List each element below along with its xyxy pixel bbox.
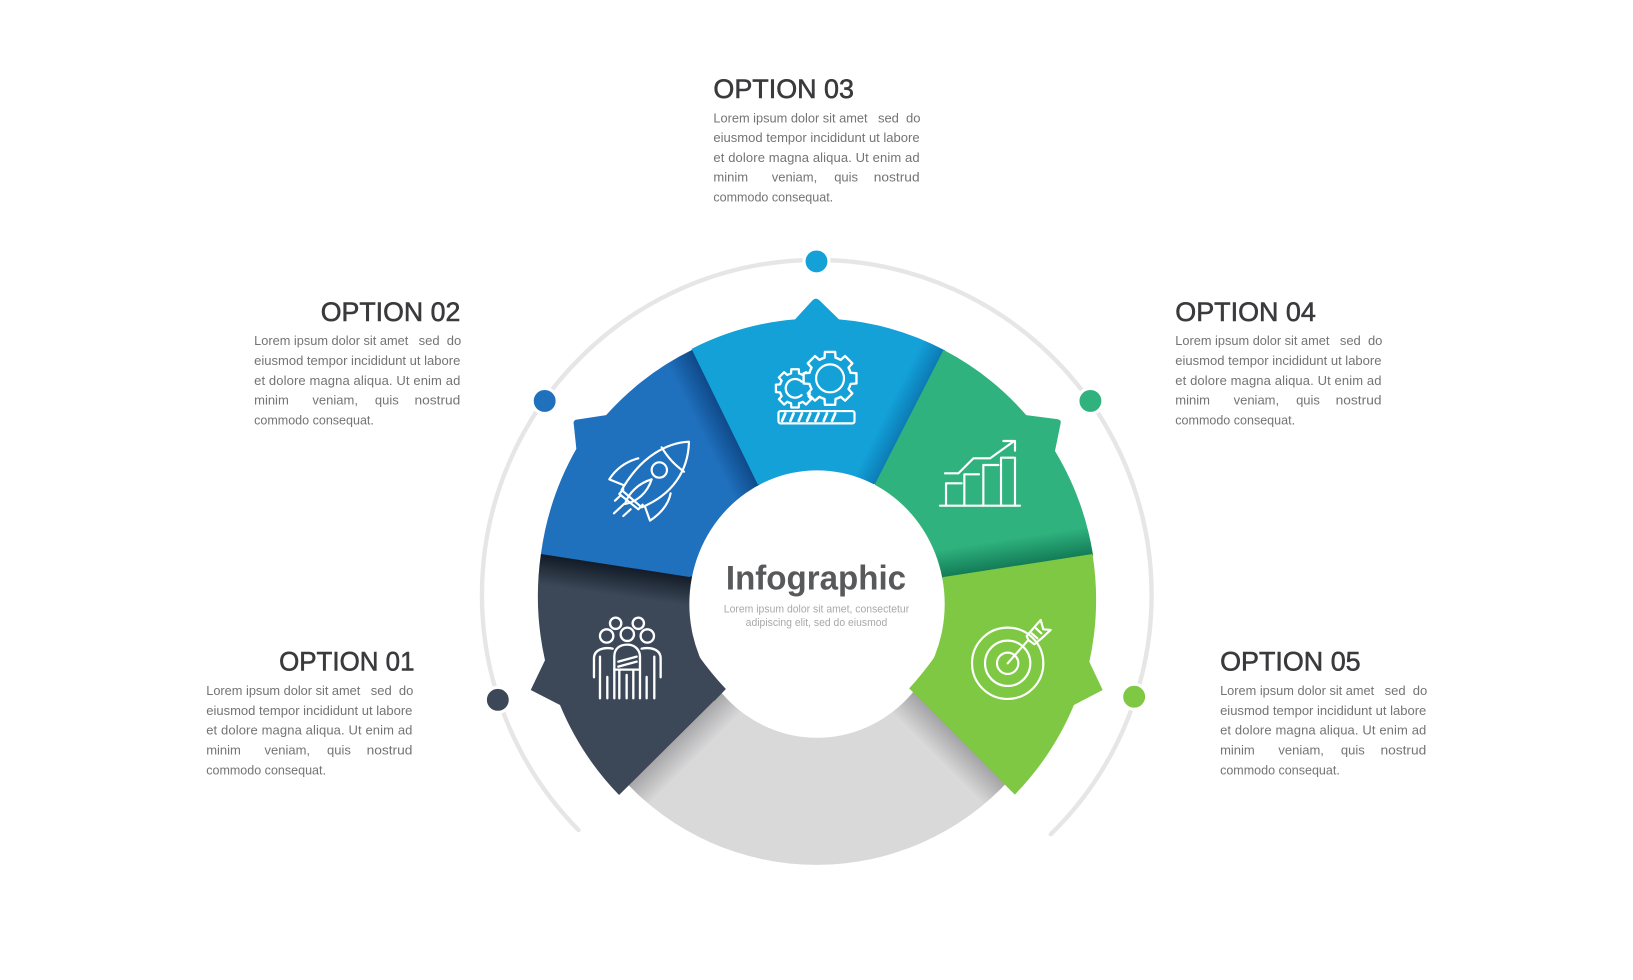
body text: nostrud bbox=[874, 170, 920, 185]
icon: team bbox=[594, 618, 661, 698]
center subtitle: Lorem ipsum dolor sit amet, consectetur bbox=[724, 603, 910, 615]
body text: veniam, bbox=[312, 393, 358, 408]
center title: Infographic bbox=[726, 559, 906, 597]
body text: do bbox=[906, 110, 921, 125]
gray base segment bbox=[623, 667, 1010, 865]
segment: option 04 teal bbox=[833, 350, 1093, 583]
dark segment inner tip bbox=[687, 656, 726, 701]
center subtitle: adipiscing elit, sed do eiusmod bbox=[746, 617, 887, 629]
heading: OPTION 05 bbox=[1220, 646, 1361, 677]
body text: commodo consequat. bbox=[1220, 762, 1340, 777]
body text: eiusmod tempor incididunt ut labore bbox=[1220, 703, 1426, 718]
dot: option 03 bbox=[804, 249, 829, 274]
body text: veniam, bbox=[265, 743, 310, 758]
body text: minim bbox=[254, 393, 289, 408]
body text: veniam, bbox=[1278, 743, 1324, 758]
body text: do bbox=[447, 333, 461, 348]
outer ring arc bbox=[482, 260, 1152, 834]
panel: option 04 bbox=[1175, 296, 1382, 427]
body text: eiusmod tempor incididunt ut labore bbox=[1175, 353, 1381, 368]
body text: Lorem ipsum dolor sit amet bbox=[254, 333, 409, 348]
segment: option 03 cyan bbox=[692, 299, 945, 500]
body text: et dolore magna aliqua. Ut enim ad bbox=[713, 150, 920, 165]
heading: OPTION 02 bbox=[321, 296, 460, 327]
body text: minim bbox=[206, 743, 241, 758]
dot: option 04 bbox=[1078, 388, 1103, 413]
body text: eiusmod tempor incididunt ut labore bbox=[254, 353, 460, 368]
body text: nostrud bbox=[1336, 393, 1381, 408]
segment: option 01 dark bbox=[531, 554, 781, 795]
body text: sed bbox=[371, 683, 392, 698]
body text: quis bbox=[1296, 393, 1320, 408]
icon: bar chart with arrow bbox=[940, 441, 1020, 506]
heading: OPTION 04 bbox=[1175, 296, 1316, 327]
body text: sed bbox=[1340, 333, 1361, 348]
body text: minim bbox=[1220, 743, 1255, 758]
body text: minim bbox=[1175, 393, 1210, 408]
panel: option 03 bbox=[713, 73, 921, 205]
body text: do bbox=[399, 683, 413, 698]
body text: commodo consequat. bbox=[254, 412, 374, 427]
body text: et dolore magna aliqua. Ut enim ad bbox=[1220, 723, 1426, 738]
body text: commodo consequat. bbox=[206, 762, 326, 777]
body text: Lorem ipsum dolor sit amet bbox=[1220, 683, 1375, 698]
body text: et dolore magna aliqua. Ut enim ad bbox=[254, 373, 460, 388]
body text: quis bbox=[834, 170, 859, 185]
icon: target with arrow bbox=[972, 620, 1051, 699]
body text: Lorem ipsum dolor sit amet bbox=[713, 110, 868, 125]
icon: gears and progress bar bbox=[776, 352, 856, 423]
heading: OPTION 03 bbox=[713, 73, 854, 104]
segment: option 02 blue bbox=[541, 349, 792, 577]
body text: Lorem ipsum dolor sit amet bbox=[1175, 333, 1330, 348]
panel: option 01 bbox=[206, 646, 414, 777]
body text: sed bbox=[419, 333, 440, 348]
center text bbox=[724, 559, 910, 629]
icon: rocket bbox=[609, 442, 689, 521]
panel: option 02 bbox=[254, 296, 461, 427]
body text: do bbox=[1413, 683, 1427, 698]
center circle bbox=[689, 470, 945, 738]
dot: option 01 bbox=[485, 687, 510, 712]
body text: sed bbox=[878, 110, 899, 125]
body text: veniam, bbox=[772, 170, 817, 185]
body text: do bbox=[1368, 333, 1382, 348]
body text: commodo consequat. bbox=[1175, 412, 1295, 427]
segment: option 05 green bbox=[854, 554, 1103, 795]
dot: option 02 bbox=[532, 388, 557, 413]
body text: veniam, bbox=[1234, 393, 1279, 408]
body text: minim bbox=[713, 170, 748, 185]
body text: eiusmod tempor incididunt ut labore bbox=[713, 130, 920, 145]
body text: nostrud bbox=[414, 393, 460, 408]
body text: nostrud bbox=[367, 743, 412, 758]
body text: sed bbox=[1385, 683, 1406, 698]
body text: et dolore magna aliqua. Ut enim ad bbox=[206, 723, 412, 738]
heading: OPTION 01 bbox=[279, 646, 414, 677]
body text: Lorem ipsum dolor sit amet bbox=[206, 683, 361, 698]
body text: commodo consequat. bbox=[713, 190, 833, 205]
body text: nostrud bbox=[1380, 743, 1426, 758]
body text: quis bbox=[1341, 743, 1365, 758]
body text: eiusmod tempor incididunt ut labore bbox=[206, 703, 412, 718]
body text: et dolore magna aliqua. Ut enim ad bbox=[1175, 373, 1381, 388]
dot: option 05 bbox=[1122, 684, 1147, 709]
green segment inner tip bbox=[909, 656, 946, 700]
body text: quis bbox=[327, 743, 351, 758]
body text: quis bbox=[375, 393, 399, 408]
panel: option 05 bbox=[1220, 646, 1427, 777]
